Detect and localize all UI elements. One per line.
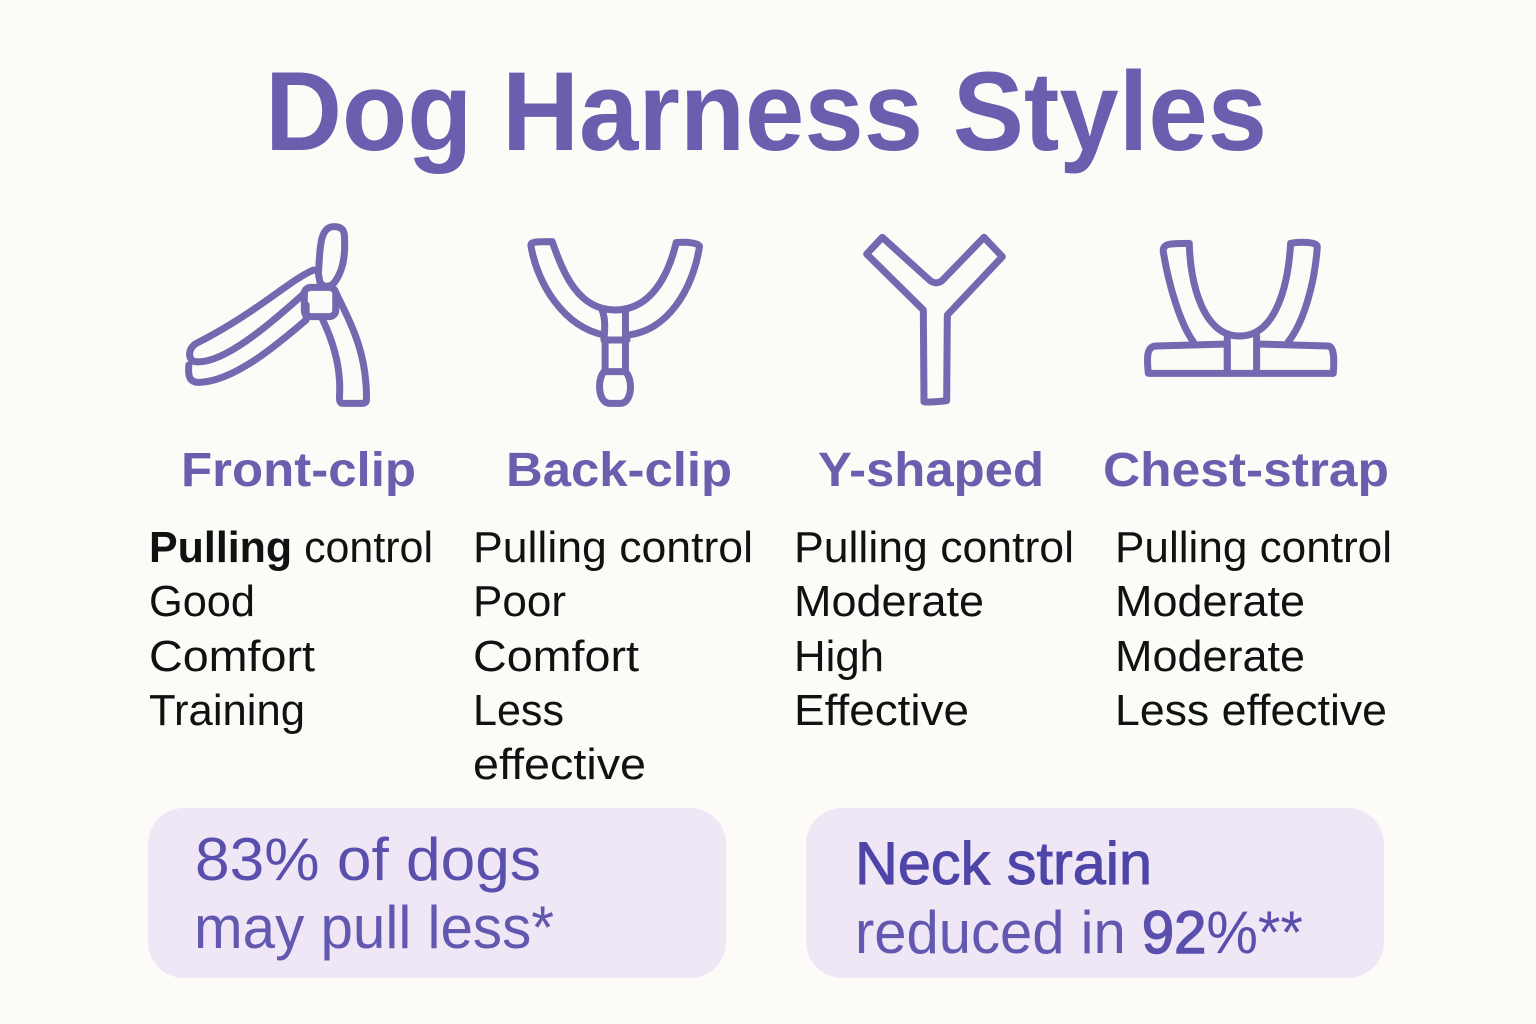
text: Y-shaped details: High — [794, 632, 884, 681]
text: front-clip details: Pulling control — [149, 523, 433, 572]
callout: 83% of dogs: may pull less* — [194, 894, 554, 961]
title: Dog Harness Styles — [265, 49, 1267, 174]
text: front-clip details: Comfort — [149, 632, 315, 681]
icon: front-clip harness — [189, 227, 366, 403]
text: back-clip details: Less — [473, 686, 564, 735]
callout: neck strain: Neck strain — [855, 830, 1152, 897]
heading: back-clip: Back-clip — [506, 444, 732, 497]
callout: neck strain — [806, 808, 1384, 978]
text: front-clip details: Training — [149, 686, 305, 735]
text: Y-shaped details: Effective — [794, 686, 969, 735]
icon: Y-shaped harness — [867, 237, 1002, 402]
text: back-clip details: Poor — [473, 577, 566, 626]
icon: chest-strap harness — [1147, 242, 1334, 373]
icon: back-clip harness — [531, 242, 699, 403]
text: back-clip details: Pulling control — [473, 523, 753, 572]
heading: front-clip: Front-clip — [181, 444, 416, 497]
heading: Y-shaped: Y-shaped — [818, 444, 1044, 497]
text: chest-strap details: Pulling control — [1115, 523, 1392, 572]
text: chest-strap details: Moderate — [1115, 577, 1305, 626]
text: chest-strap details: Less effective — [1115, 686, 1387, 735]
text: front-clip details: Good — [149, 577, 255, 626]
text: Y-shaped details: Moderate — [794, 577, 984, 626]
text: back-clip details: effective — [473, 740, 646, 789]
callout: neck strain: reduced in 92%** — [855, 899, 1303, 966]
text: front-clip details — [149, 523, 433, 735]
text: back-clip details — [473, 523, 753, 789]
text: back-clip details: Comfort — [473, 632, 639, 681]
text: chest-strap details — [1115, 523, 1392, 735]
callout: 83% of dogs — [148, 808, 726, 978]
text: chest-strap details: Moderate — [1115, 632, 1305, 681]
heading: chest-strap: Chest-strap — [1103, 444, 1389, 497]
text: Y-shaped details — [794, 523, 1074, 735]
text: Y-shaped details: Pulling control — [794, 523, 1074, 572]
callout: 83% of dogs: 83% of dogs — [195, 826, 541, 893]
